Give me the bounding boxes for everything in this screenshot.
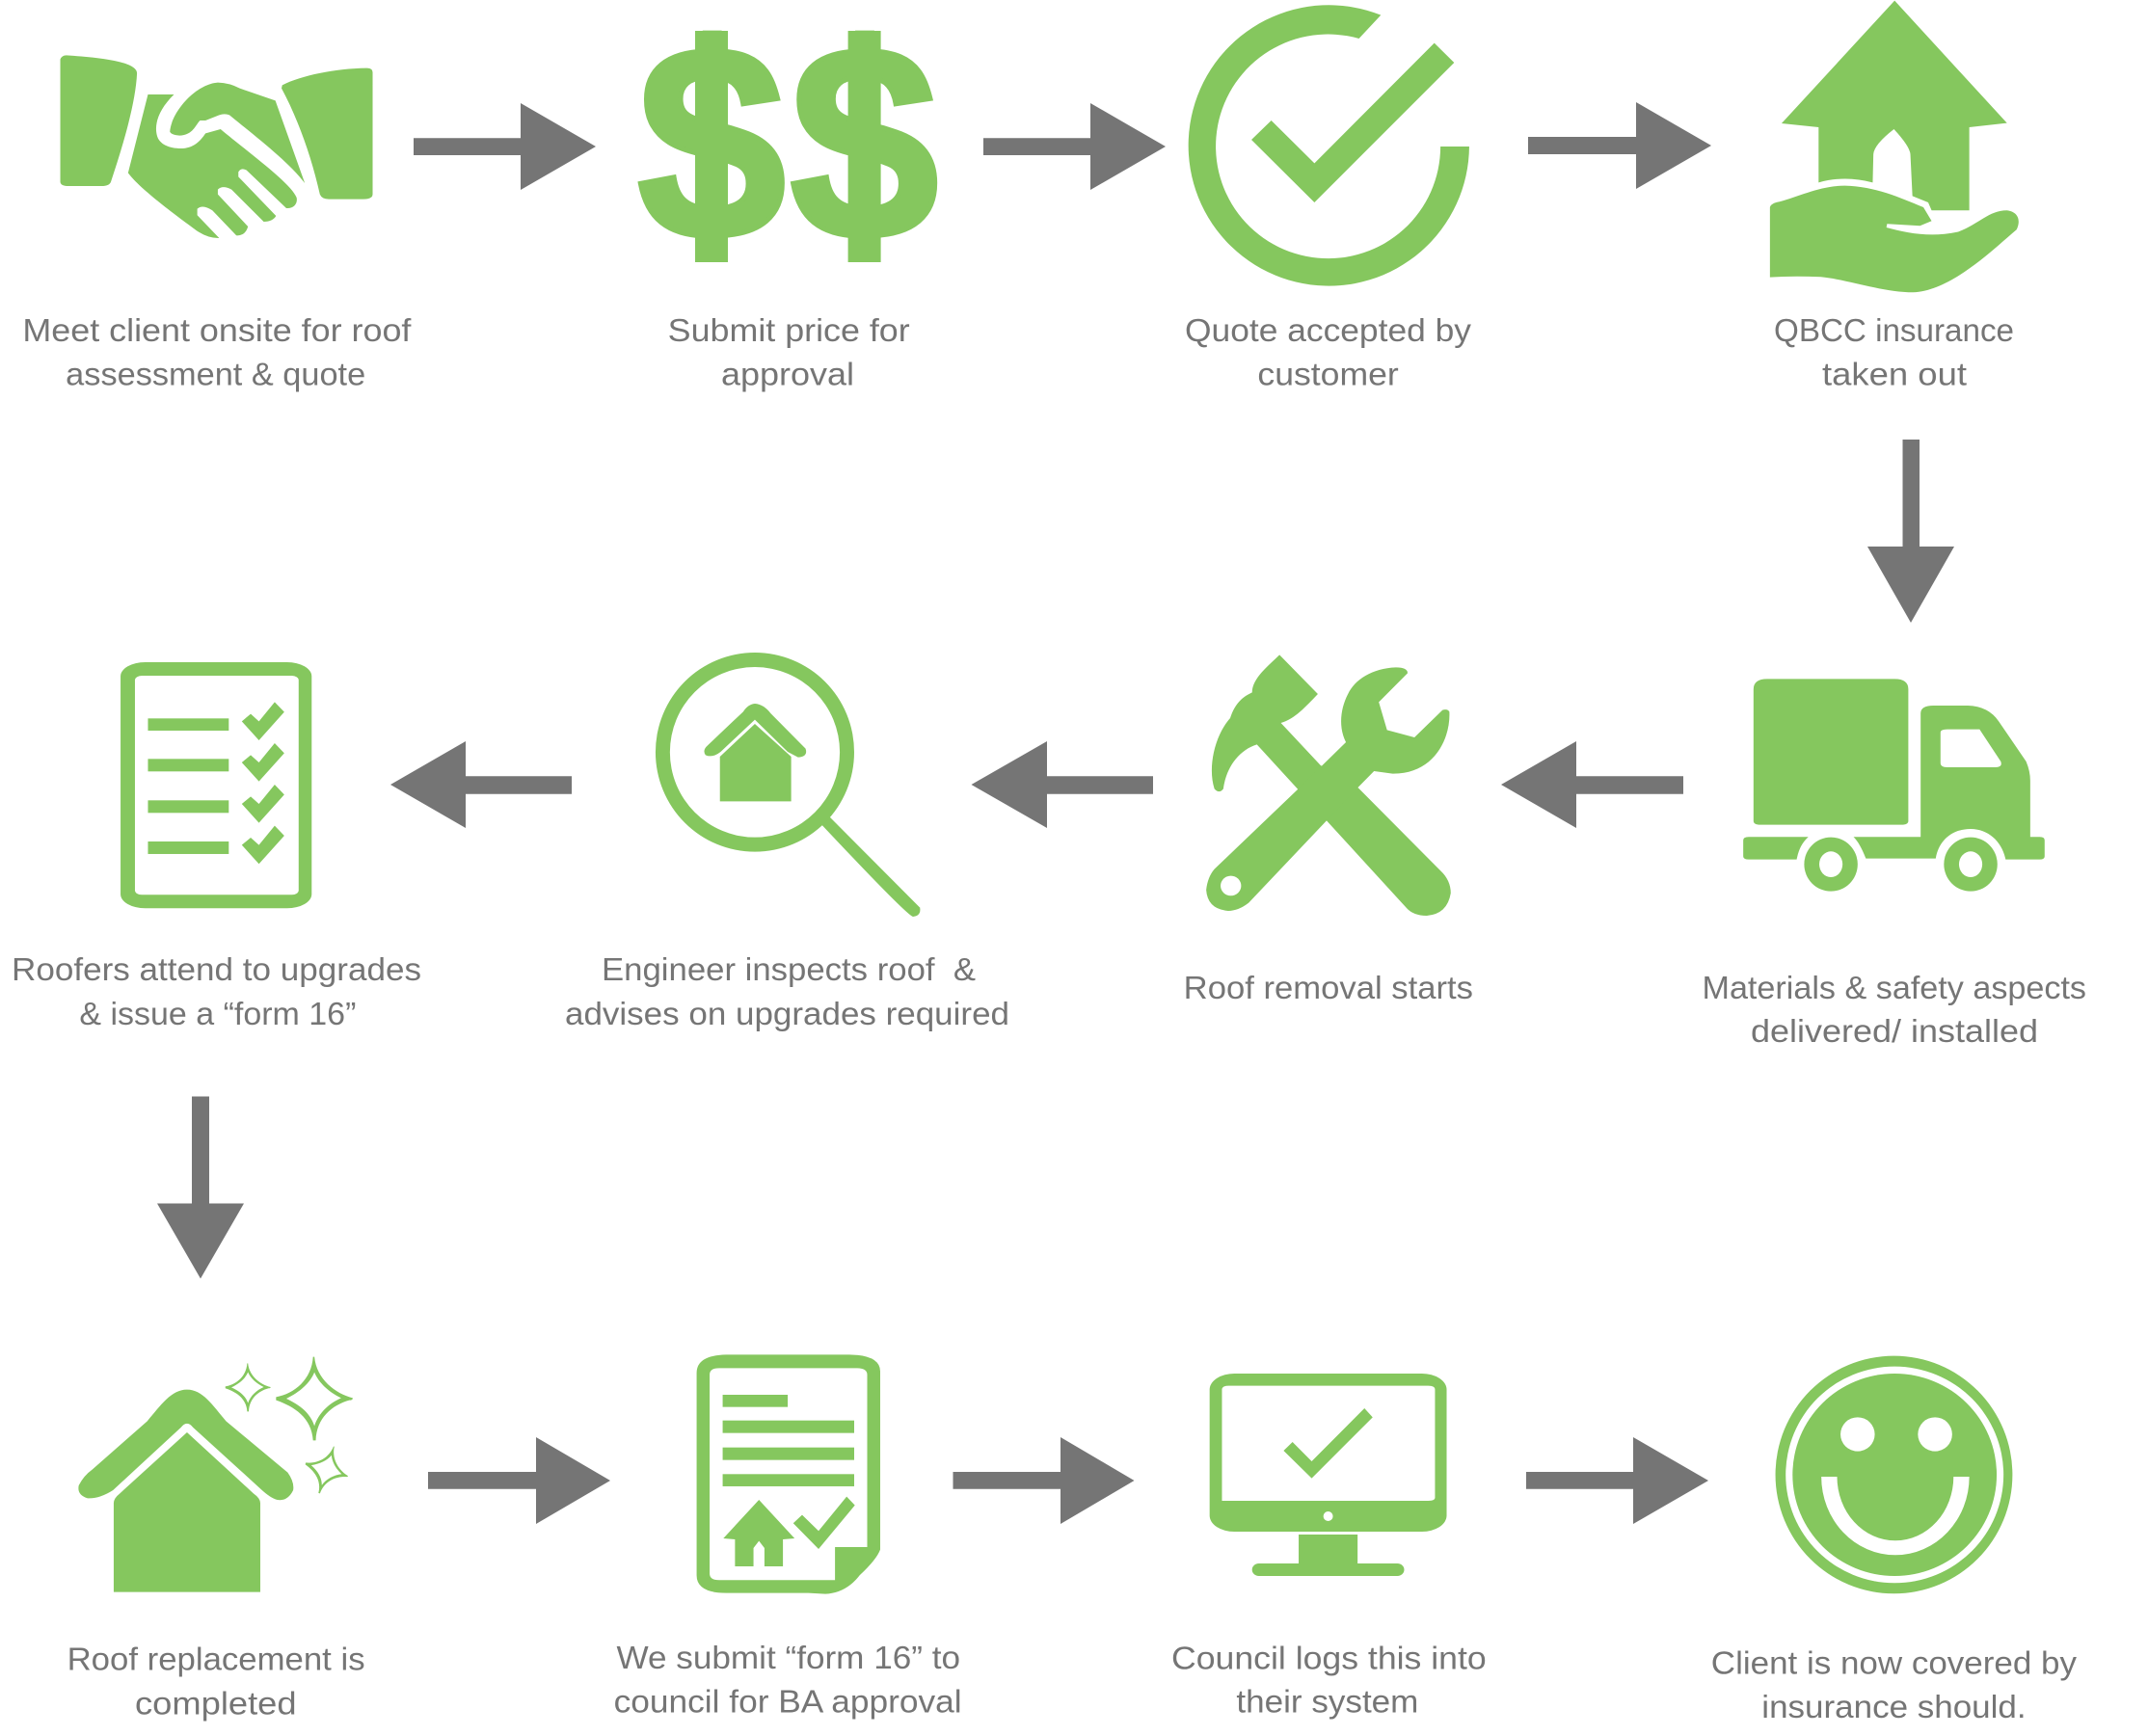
label: step 10: council for BA approval (614, 1683, 962, 1719)
arrow: step 2 to 3 (983, 103, 1166, 190)
label: step 10 (614, 1640, 962, 1719)
label: step 9: completed (135, 1685, 297, 1721)
label: step 11: their system (1236, 1683, 1418, 1719)
label: step 11: Council logs this into (1171, 1640, 1487, 1675)
arrow: step 4 down to 5 (1867, 440, 1954, 623)
label: step 2: approval (721, 356, 854, 391)
label: step 9: Roof replacement is (67, 1642, 365, 1677)
label: step 9 (67, 1642, 365, 1721)
arrow: step 9 to 10 (428, 1437, 610, 1524)
label: step 1: assessment & quote (66, 356, 365, 391)
label: step 6: Roof removal starts (1184, 970, 1473, 1005)
label: step 3 (1185, 312, 1472, 391)
label: step 1: Meet client onsite for roof (22, 312, 412, 348)
label: step 5: delivered/ installed (1751, 1013, 2038, 1049)
icon: house held in hand (1770, 1, 2019, 292)
arrow: step 8 down to 9 (157, 1097, 244, 1278)
label: step 7 (565, 951, 1009, 1031)
label: step 4: QBCC insurance (1774, 312, 2014, 348)
label: step 11 (1171, 1640, 1487, 1719)
label: step 8: Roofers attend to upgrades (12, 951, 421, 987)
icon: check mark in circle (1189, 5, 1469, 286)
label: step 12 (1711, 1645, 2078, 1724)
icon: dollar signs (637, 0, 939, 298)
icon: smiley face (1776, 1356, 2012, 1593)
icon: computer monitor with check (1210, 1374, 1447, 1576)
label: step 3: customer (1257, 356, 1399, 391)
label: step 8: & issue a “form 16” (79, 996, 356, 1031)
icon: hammer and wrench (1206, 654, 1451, 916)
icon: form document (697, 1354, 880, 1594)
label: step 2: Submit price for (668, 312, 910, 348)
icon: handshake (61, 55, 373, 238)
label: step 12: insurance should. (1761, 1689, 2027, 1724)
icon: delivery truck (1743, 679, 2045, 892)
label: step 3: Quote accepted by (1185, 312, 1472, 348)
label: step 5: Materials & safety aspects (1703, 970, 2086, 1005)
arrow: step 6 to 7 (972, 741, 1153, 828)
arrow: step 5 to 6 (1501, 741, 1683, 828)
label: step 2 (668, 312, 910, 391)
arrow: step 7 to 8 (390, 741, 572, 828)
arrow: step 3 to 4 (1528, 102, 1711, 189)
label: step 10: We submit “form 16” to (617, 1640, 960, 1675)
icon: clean house with sparkles (78, 1357, 356, 1592)
label: step 7: Engineer inspects roof & (602, 951, 976, 987)
arrow: step 11 to 12 (1526, 1437, 1708, 1524)
label: step 7: advises on upgrades required (565, 996, 1009, 1031)
icon: magnifying glass over house (656, 653, 920, 917)
label: step 1 (22, 312, 412, 391)
label: step 4: taken out (1822, 356, 1967, 391)
label: step 4 (1774, 312, 2014, 391)
arrow: step 1 to 2 (414, 103, 596, 190)
icon: checklist clipboard (121, 662, 311, 908)
label: step 12: Client is now covered by (1711, 1645, 2078, 1681)
label: step 8 (12, 951, 421, 1031)
arrow: step 10 to 11 (953, 1437, 1134, 1524)
label: step 5 (1703, 970, 2086, 1049)
